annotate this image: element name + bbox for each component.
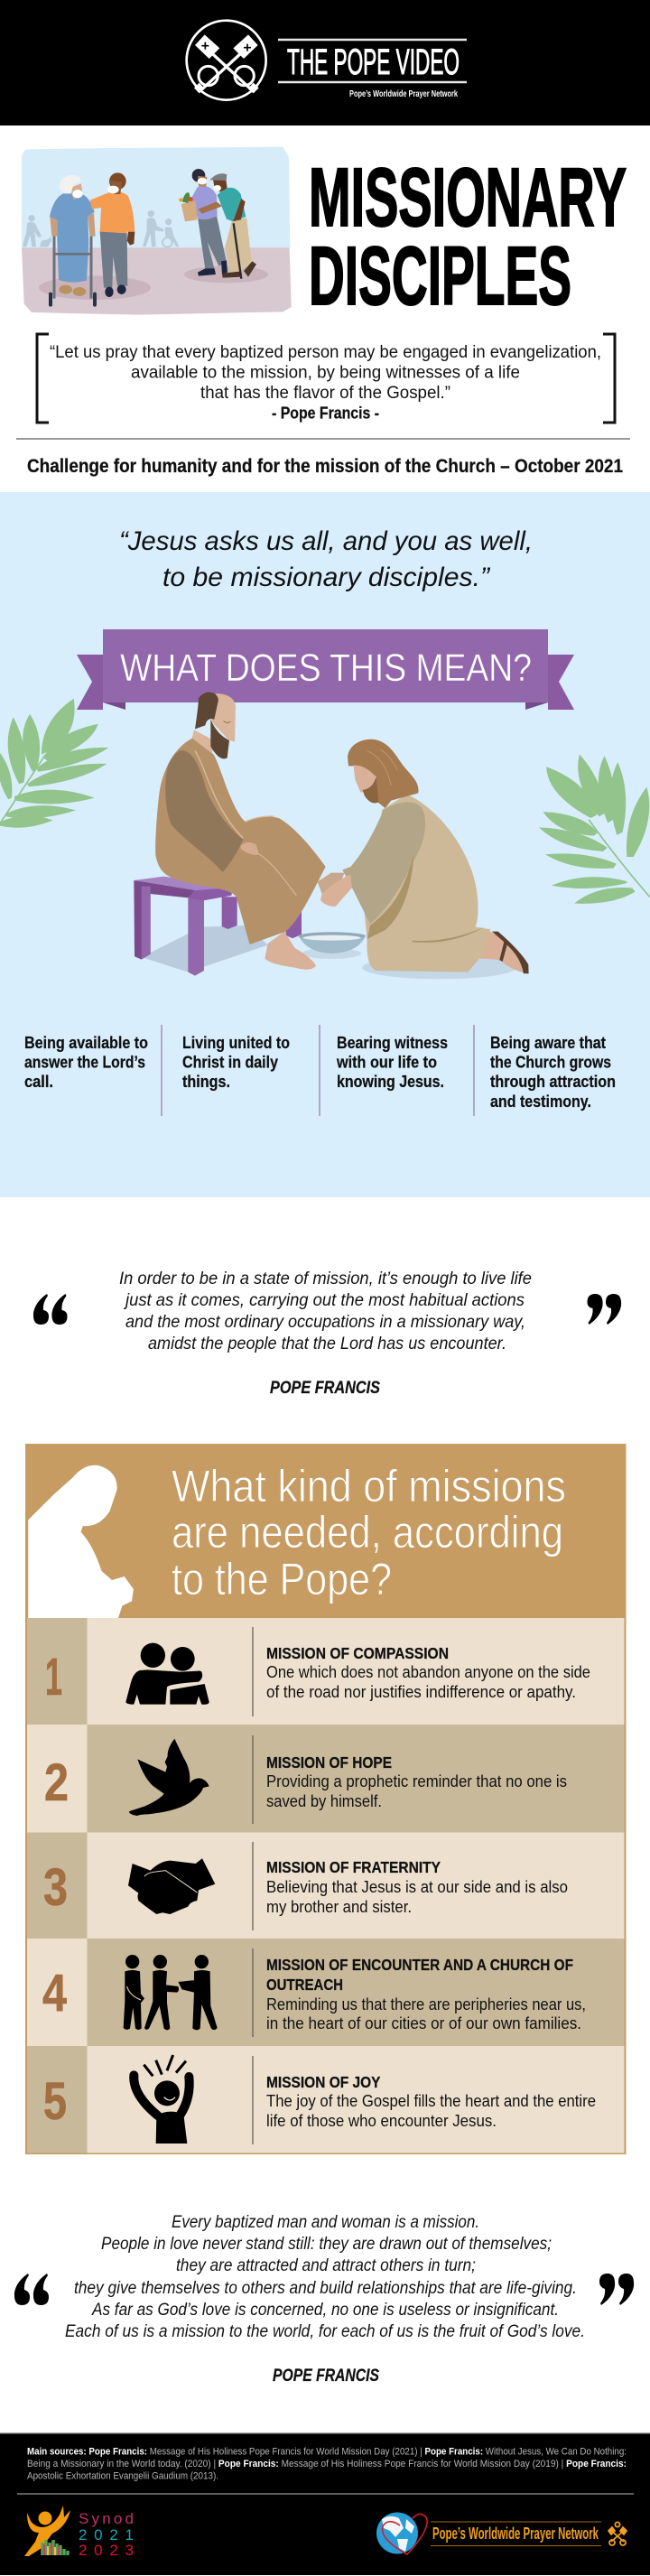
mission row 1: 1 [45,1648,62,1706]
mission row 4: MISSION OF ENCOUNTER AND A CHURCH OF [266,1956,573,1974]
icon: praying Pope silhouette [28,1465,134,1618]
mission row 3: 3 [43,1858,68,1917]
text: meaning 4: Being aware that [490,1033,606,1052]
mission row 4 [27,1939,625,2046]
quote text: they are attracted and attract others in turn; [176,2255,476,2275]
text: meaning 4: through attraction [490,1072,616,1091]
text: meaning 1: call. [24,1072,53,1091]
banner: what does this mean [77,629,574,710]
illustration: people helping the elderly [22,147,292,315]
sources text: Main sources: Pope Francis: Message of His Holiness Pope Francis for World Mission Day (2021) | Pope Francis: Without Jesus, We Can Do Nothing: [27,2447,627,2458]
mission row 2 [27,1725,625,1833]
text: meaning 3: Bearing witness [337,1033,448,1052]
dividers between the four meanings [162,1025,474,1116]
mission row 4: OUTREACH [266,1976,343,1994]
mission row 4: in the heart of our cities or of our own families. [266,2014,581,2032]
text: meaning 2: Christ in daily [182,1053,279,1071]
elderly man with cane [209,173,256,279]
mission row 3: my brother and sister. [266,1898,412,1916]
mission row 2: saved by himself. [266,1792,382,1810]
quote text: and the most ordinary occupations in a missionary way, [125,1312,525,1332]
prayer quote with brackets: that has the flavor of the Gospel.” [200,384,450,403]
mission row 5: MISSION OF JOY [266,2073,381,2091]
callout: state of mission quote [33,1269,621,1398]
logo: Synod 2021-2023 [24,2506,134,2559]
panel heading: to the Pope? [172,1554,392,1604]
quote text [119,1269,532,1353]
logo: Synod 2021-2023: Synod [79,2510,134,2527]
quote: Jesus asks us all [119,526,533,592]
panel: kinds of missions [25,1444,627,2154]
text: meaning 2: Living united to [182,1033,290,1052]
quote text: Every baptized man and woman is a mission. [172,2212,479,2232]
icon: right palm branch [539,755,650,904]
old woman [49,175,97,307]
prayer quote with brackets: “Let us pray that every baptized person may be engaged in evangelization, [50,343,601,362]
logo: Pope's Worldwide Prayer Network [376,2512,627,2554]
icon: small crossed keys [608,2522,627,2545]
young man with grocery bag [179,169,228,276]
quote: Jesus asks us all: “Jesus asks us all, and you as well, [119,526,533,556]
icon: compassion, two people embracing [125,1643,209,1705]
text: meaning 3: knowing Jesus. [337,1072,444,1091]
mission row 3: MISSION OF FRATERNITY [266,1858,441,1876]
mission row 2: Providing a prophetic reminder that no one is [266,1772,567,1790]
panel heading: What kind of missions [172,1461,566,1511]
water basin [298,932,366,953]
mission row 1 [27,1618,625,1725]
illustration: Jesus washing the feet of a disciple [134,693,529,979]
sources text: Apostolic Exhortation Evangelii Gaudium (2013). [27,2470,218,2481]
icon: closing quote mark [599,2274,634,2305]
logo: Synod 2021-2023: 2021 [79,2526,134,2543]
text: meaning 1: Being available to [24,1033,148,1052]
stool [134,877,516,979]
quote text: they give themselves to others and build relationships that are life-giving. [74,2278,577,2298]
sources text [27,2447,627,2481]
panel: what does this mean [0,492,650,1197]
icon: dove [129,1739,209,1816]
mission row 2: 2 [44,1753,69,1812]
mission row 5 [27,2046,625,2153]
mission row 4: Reminding us that there are peripheries near us, [266,1995,586,2013]
prayer quote with brackets [37,334,615,423]
quote: Jesus asks us all: to be missionary disciples.” [162,563,491,592]
mission row 4: 4 [42,1964,67,2023]
quote text: People in love never stand still: they are drawn out of themselves; [101,2234,552,2254]
man in orange sweater [90,172,135,297]
mission row 3: Believing that Jesus is at our side and is also [266,1878,568,1896]
quote text [65,2212,585,2341]
mission row 2: MISSION OF HOPE [266,1753,392,1772]
quote text: As far as God’s love is concerned, no one is useless or insignificant. [91,2300,559,2320]
text: meaning 2 [182,1033,290,1091]
callout: every baptized man and woman quote: POPE FRANCIS [273,2366,379,2385]
icon: closing quote mark [587,1294,621,1325]
icon: three people encounter [124,1955,218,2030]
callout: state of mission quote: POPE FRANCIS [270,1378,380,1398]
prayer quote with brackets: - Pope Francis - [272,405,379,423]
quote text: just as it comes, carrying out the most habitual actions [123,1290,525,1310]
quote text: In order to be in a state of mission, it’s enough to live life [119,1269,532,1288]
header band: The Pope Video: Pope’s Worldwide Prayer Network [349,88,458,99]
panel heading: are needed, according [172,1507,563,1558]
banner: what does this mean: WHAT DOES THIS MEAN? [120,646,532,690]
footer band [0,2433,650,2575]
header band: The Pope Video [0,0,650,126]
text: meaning 4: the Church grows [490,1053,611,1071]
mission row 5: life of those who encounter Jesus. [266,2112,497,2130]
Jesus figure [318,739,529,973]
mission row 1: MISSION OF COMPASSION [266,1644,449,1662]
quote text: amidst the people that the Lord has us encounter. [148,1334,506,1353]
text: meaning 1 [24,1033,148,1091]
text: meaning 1: answer the Lord’s [24,1053,145,1071]
icon: handshake [128,1858,215,1914]
panel heading [172,1461,566,1604]
mission row 1: of the road nor justifies indifference or apathy. [266,1683,576,1701]
text: meaning 3: with our life to [336,1053,437,1071]
icon: opening quote mark [14,2274,49,2305]
mission row 5: 5 [43,2072,67,2131]
logo: Synod 2021-2023: 2023 [79,2542,134,2559]
icon: globe with heart [376,2512,427,2554]
prayer quote with brackets: available to the mission, by being witnesses of a life [131,363,520,383]
mission row 1: One which does not abandon anyone on the side [266,1663,590,1681]
icon: opening quote mark [33,1294,67,1325]
text: meaning 3 [336,1033,448,1091]
icon: joyful person with raised arms [134,2055,190,2144]
sources text: Being a Missionary in the World today. (2020) | Pope Francis: Message of His Holiness Pope Francis for World Mission Day (2019) | Pope Francis: [27,2459,627,2469]
mission row 3 [27,1833,625,1939]
callout: every baptized man and woman quote [14,2212,634,2385]
header band: The Pope Video: THE POPE VIDEO [287,42,460,82]
text: meaning 2: things. [182,1072,230,1091]
icon: crossed keys logo [187,21,266,100]
title [309,152,627,322]
disciple figure [155,693,326,970]
icon: left palm branch [0,699,108,828]
quote text: Each of us is a mission to the world, for each of us is the fruit of God’s love. [65,2321,585,2341]
mission row 5: The joy of the Gospel fills the heart and the entire [266,2092,596,2110]
text: meaning 4: and testimony. [490,1092,591,1111]
text: meaning 4 [490,1033,616,1111]
